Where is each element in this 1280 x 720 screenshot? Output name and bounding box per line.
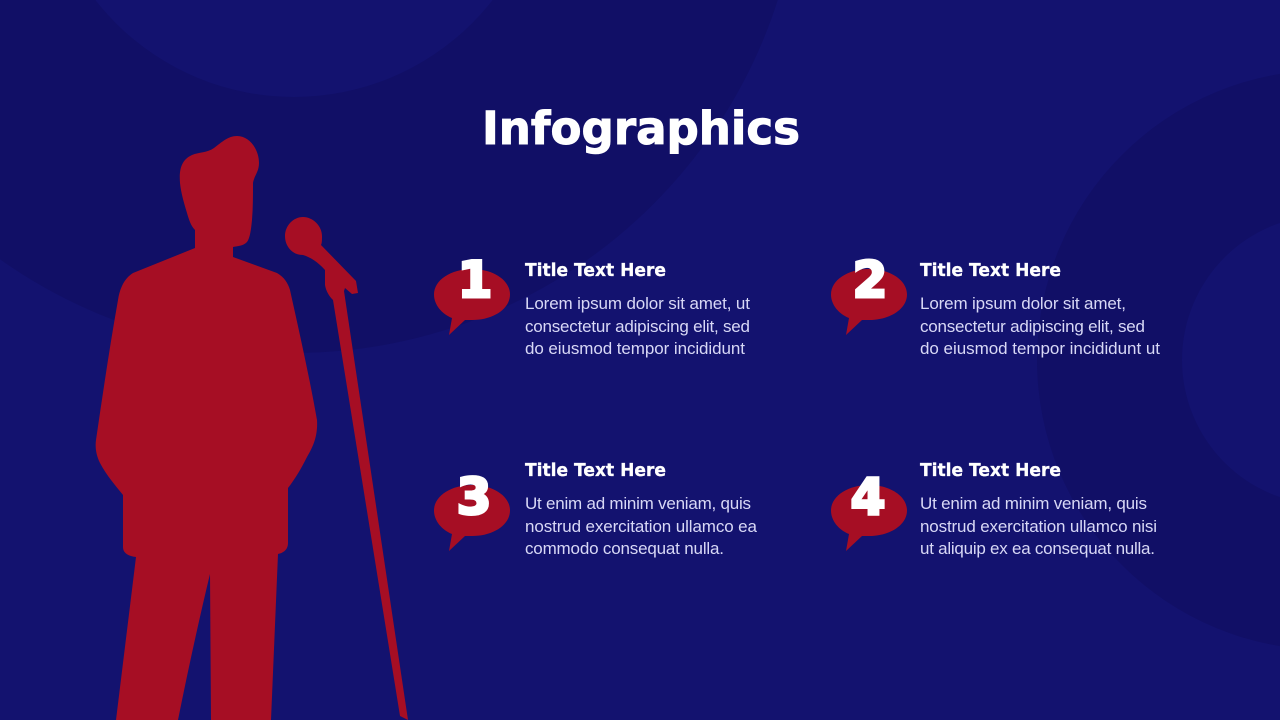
item 2 text: do eiusmod tempor incididunt ut <box>920 339 1160 358</box>
person silhouette <box>96 136 317 720</box>
item 3 text: nostrud exercitation ullamco ea <box>525 517 758 536</box>
item 1 text: Lorem ipsum dolor sit amet, ut <box>525 294 750 313</box>
item 1 text: do eiusmod tempor incididunt <box>525 339 745 358</box>
item 4 heading: Title Text Here <box>920 460 1061 481</box>
item 4 text: nostrud exercitation ullamco nisi <box>920 517 1157 536</box>
item 4 <box>831 460 1157 558</box>
title: Infographics <box>482 102 800 155</box>
speech bubble 1 <box>434 269 510 335</box>
item 2 text: Lorem ipsum dolor sit amet, <box>920 294 1126 313</box>
item 1 <box>434 251 750 358</box>
item 2 text <box>920 294 1160 358</box>
item 2 text: consectetur adipiscing elit, sed <box>920 317 1145 336</box>
item 3 text: Ut enim ad minim veniam, quis <box>525 494 751 513</box>
illustration: speaker silhouette with microphone <box>96 136 408 720</box>
number 3: 3 <box>457 468 491 526</box>
number 2: 2 <box>853 251 887 309</box>
speech bubble 2 <box>831 269 907 335</box>
number 1: 1 <box>458 251 492 309</box>
microphone and stand <box>285 217 408 720</box>
item 4 text: Ut enim ad minim veniam, quis <box>920 494 1147 513</box>
item 1 text: consectetur adipiscing elit, sed <box>525 317 750 336</box>
item 3 text: commodo consequat nulla. <box>525 539 724 558</box>
item 2 heading: Title Text Here <box>920 260 1061 281</box>
item 3 text <box>525 494 758 558</box>
number 4: 4 <box>851 468 885 526</box>
item 3 <box>434 460 758 558</box>
speech bubble 4 <box>831 485 907 551</box>
item 4 text: ut aliquip ex ea consequat nulla. <box>920 539 1155 558</box>
item 1 heading: Title Text Here <box>525 260 666 281</box>
item 2 <box>831 251 1160 358</box>
item 1 text <box>525 294 750 358</box>
item 4 text <box>920 494 1157 558</box>
item 3 heading: Title Text Here <box>525 460 666 481</box>
speech bubble 3 <box>434 485 510 551</box>
